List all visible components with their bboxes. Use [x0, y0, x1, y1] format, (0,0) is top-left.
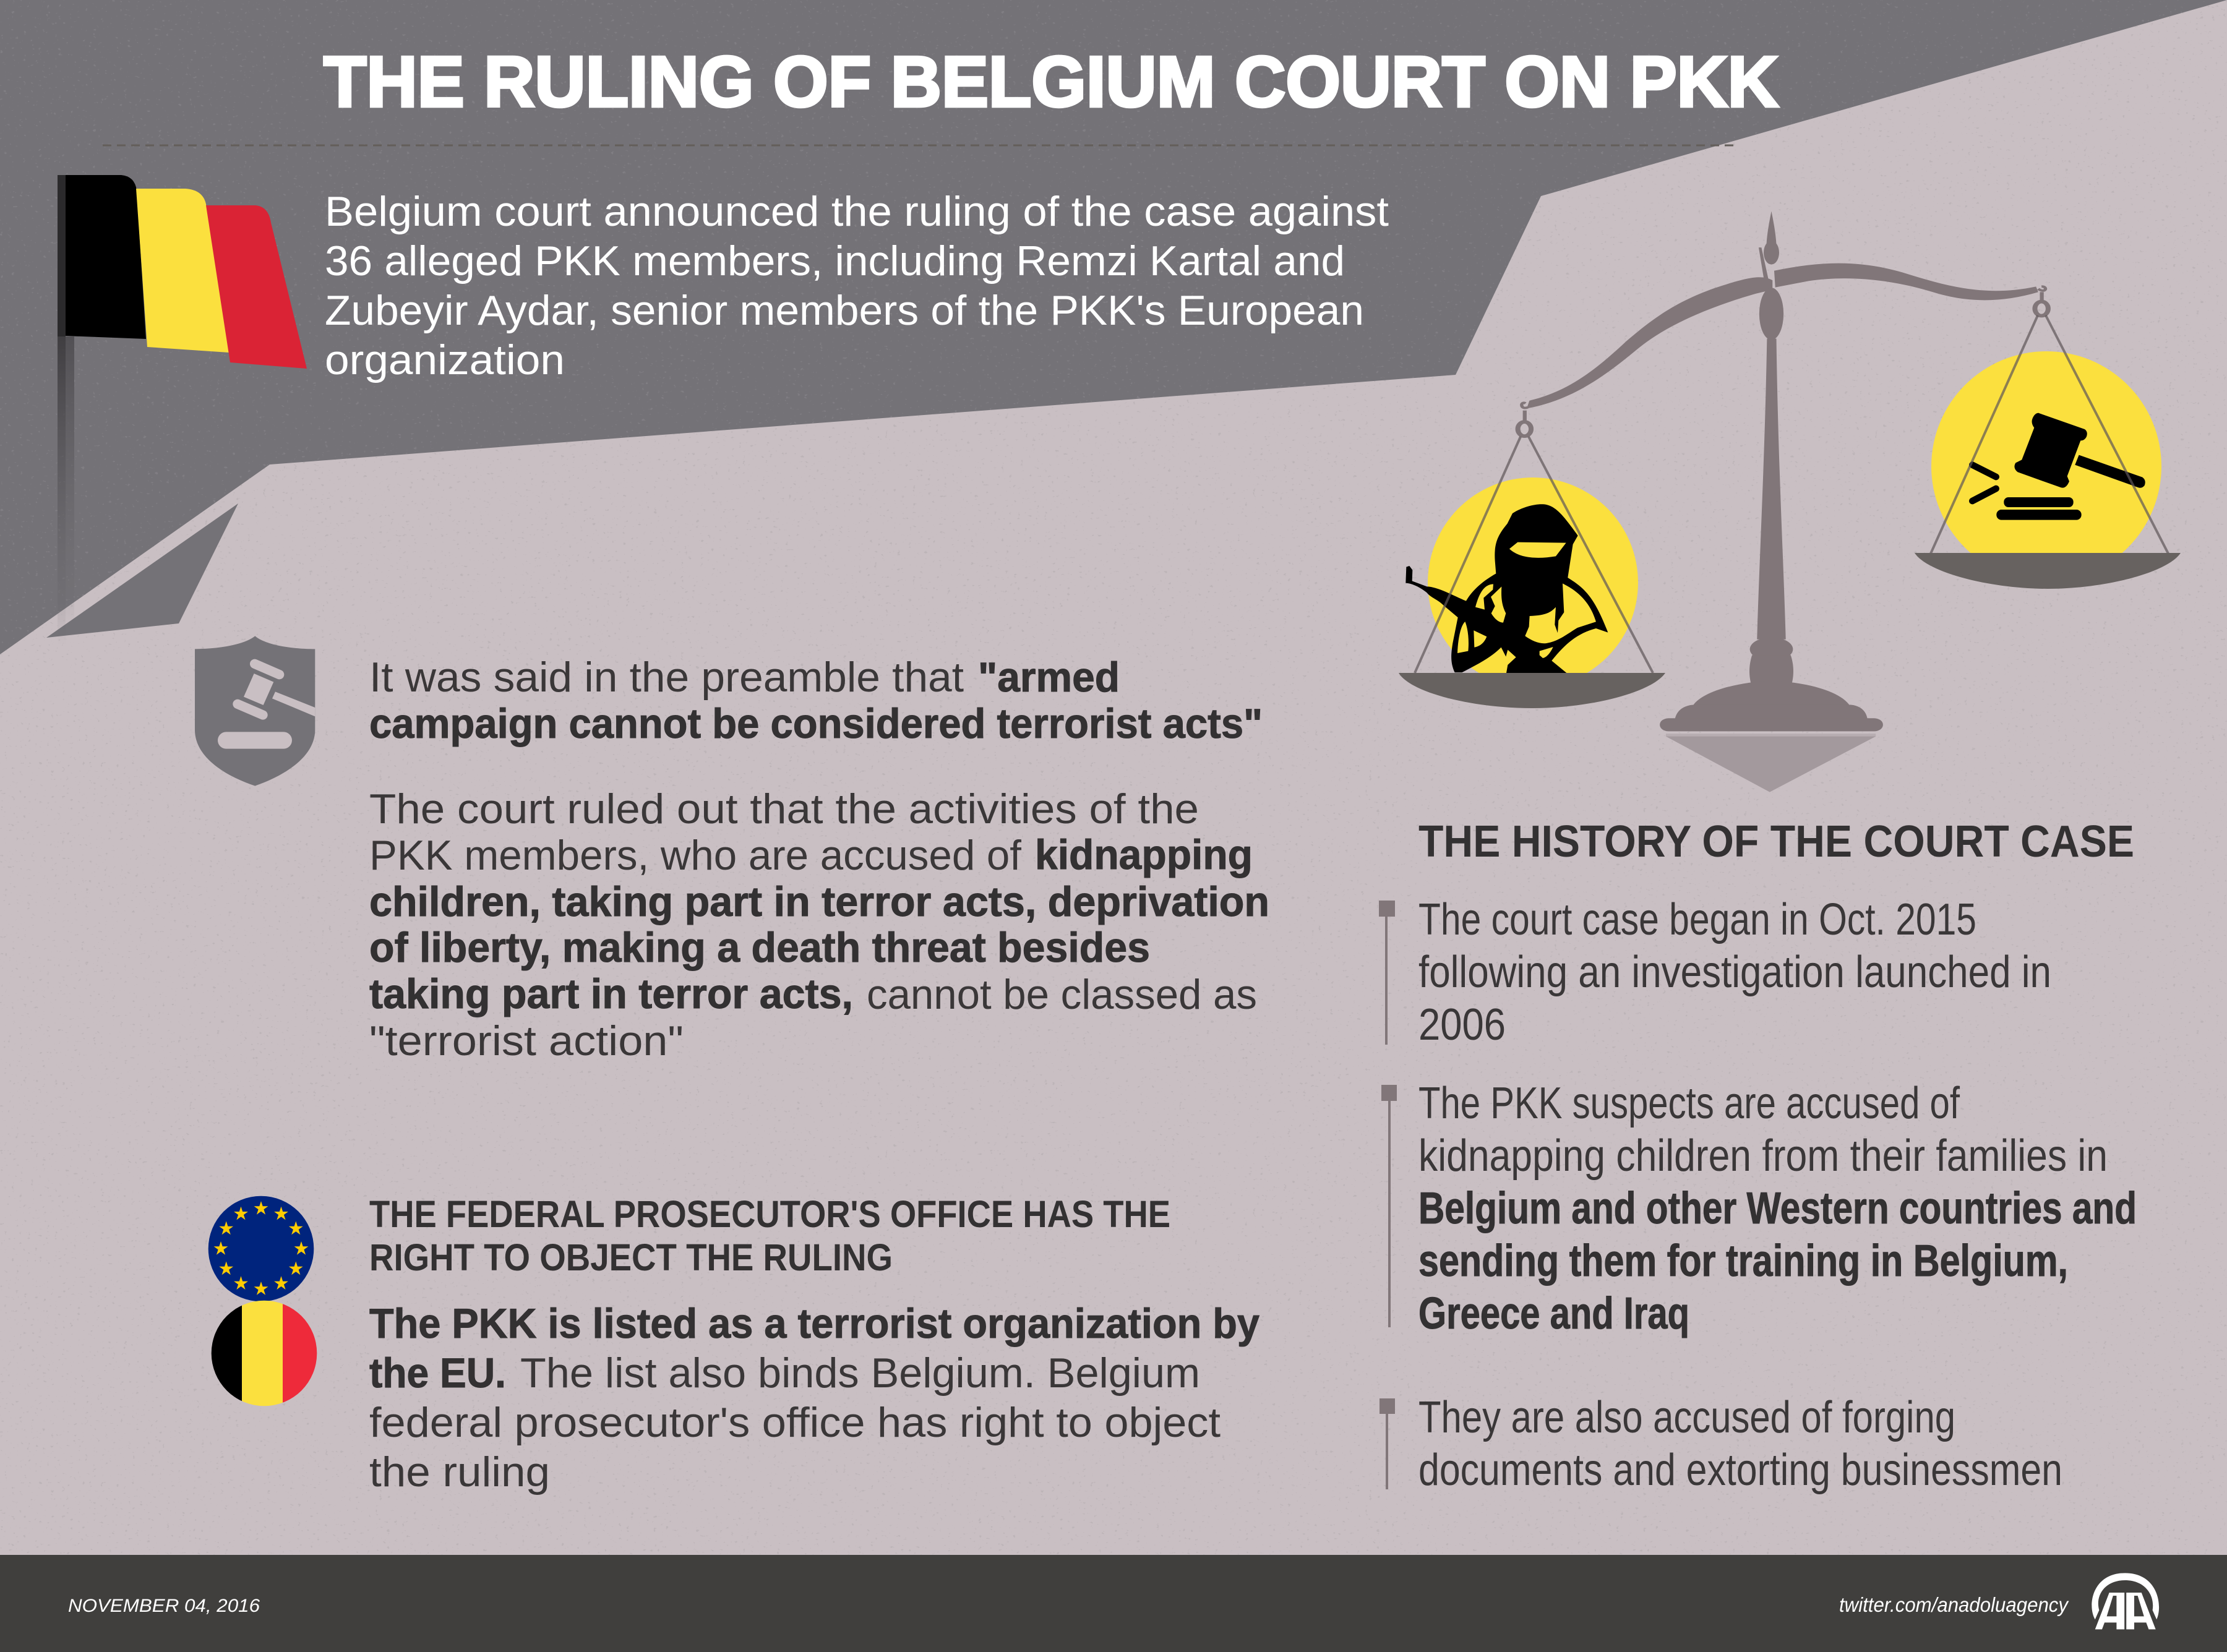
- panel: dark header banner: [0, 0, 2227, 654]
- text block: preamble statement: campaign cannot be considered terrorist acts": [369, 700, 1263, 747]
- right scale pan: [1915, 553, 2181, 589]
- text block: court ruling: [369, 785, 1269, 1064]
- footer bar: [0, 1555, 2227, 1652]
- intro text block: Belgium court announced the ruling of the case against: [325, 188, 1389, 235]
- icon: gavel: [1972, 413, 2145, 520]
- text block: EU listing: the ruling: [369, 1449, 550, 1496]
- heading: federal prosecutor: [369, 1193, 1170, 1278]
- right pan strings: [1931, 315, 2168, 554]
- history item 2: [1418, 1079, 2137, 1338]
- history item 1: following an investigation launched in: [1418, 948, 2051, 997]
- history item 1: The court case began in Oct. 2015: [1418, 895, 1976, 944]
- text block: EU listing: [369, 1300, 1259, 1496]
- history item 2: The PKK suspects are accused of: [1418, 1079, 1960, 1128]
- text block: preamble statement: [369, 654, 1263, 747]
- text block: court ruling: PKK members, who are accused of: [369, 832, 1021, 879]
- intro text block: [325, 188, 1389, 383]
- intro text block: Zubeyir Aydar, senior members of the PKK's European: [325, 287, 1364, 334]
- icon: Belgium flag circle: [211, 1300, 317, 1406]
- footer social handle: twitter.com/anadoluagency: [1839, 1593, 2069, 1616]
- icon: Belgian flag on pole: [58, 175, 307, 645]
- history item 2: Greece and Iraq: [1418, 1289, 1689, 1338]
- text block: court ruling: "terrorist action": [369, 1017, 684, 1064]
- history item 2: sending them for training in Belgium,: [1418, 1236, 2068, 1286]
- right yellow circle: [1931, 351, 2161, 553]
- scale stand and beam: [1518, 211, 2048, 792]
- intro text block: organization: [325, 336, 565, 383]
- text block: preamble statement: "armed: [978, 654, 1120, 701]
- heading: federal prosecutor: THE FEDERAL PROSECUTOR'S OFFICE HAS THE: [369, 1193, 1170, 1235]
- text block: court ruling: cannot be classed as: [867, 971, 1257, 1018]
- icon: EU flag circle: [208, 1196, 314, 1301]
- text block: EU listing: The PKK is listed as a terrorist organization by: [369, 1300, 1259, 1347]
- intro text block: 36 alleged PKK members, including Remzi Kartal and: [325, 238, 1345, 285]
- illustration: balance scale: [1399, 211, 2181, 792]
- heading: federal prosecutor: RIGHT TO OBJECT THE RULING: [369, 1236, 893, 1278]
- heading: history of the court case: THE HISTORY OF THE COURT CASE: [1418, 817, 2134, 867]
- history item 3: [1418, 1393, 2062, 1495]
- text block: preamble statement: It was said in the preamble that: [369, 654, 964, 701]
- icon: shield with gavel: [195, 636, 315, 786]
- bullet marker 3: [1380, 1398, 1395, 1489]
- text block: court ruling: children, taking part in terror acts, deprivation: [369, 878, 1269, 925]
- history item 3: They are also accused of forging: [1418, 1393, 1955, 1442]
- left yellow circle: [1428, 477, 1638, 688]
- history item 1: 2006: [1418, 1000, 1506, 1050]
- text block: court ruling: of liberty, making a death threat besides: [369, 924, 1150, 971]
- text block: EU listing: the EU.: [369, 1350, 506, 1397]
- icon: masked militant with rifle: [1405, 504, 1608, 673]
- history item 1: [1418, 895, 2051, 1050]
- icon: Anadolu Agency logo: [2092, 1573, 2159, 1629]
- history item 2: kidnapping children from their families in: [1418, 1131, 2108, 1181]
- text block: court ruling: taking part in terror acts,: [369, 970, 853, 1017]
- text block: court ruling: kidnapping: [1035, 831, 1253, 878]
- text block: EU listing: The list also binds Belgium. Belgium: [520, 1350, 1200, 1397]
- bullet marker 1: [1379, 901, 1395, 1045]
- left scale pan: [1399, 673, 1665, 708]
- footer date: NOVEMBER 04, 2016: [68, 1596, 260, 1616]
- text block: EU listing: federal prosecutor's office has right to object: [369, 1399, 1221, 1446]
- text block: court ruling: The court ruled out that the activities of the: [369, 785, 1199, 832]
- title: THE RULING OF BELGIUM COURT ON PKK: [324, 41, 1779, 122]
- left pan strings: [1415, 437, 1653, 673]
- history item 3: documents and extorting businessmen: [1418, 1445, 2062, 1495]
- bullet marker 2: [1381, 1085, 1397, 1327]
